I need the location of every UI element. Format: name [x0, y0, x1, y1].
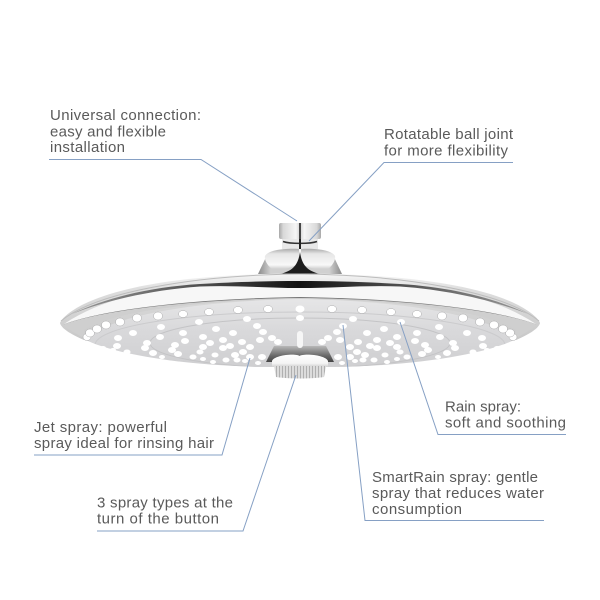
callout: 3 spray types: 3 spray types at the — [97, 494, 233, 512]
mount: upper cylinder — [279, 223, 321, 239]
callout: rain spray: soft and soothing — [445, 414, 566, 432]
callout: universal connection: Universal connection: — [50, 107, 201, 124]
button stem — [297, 331, 303, 348]
callout: 3 spray types — [97, 375, 296, 531]
callout: rain spray — [400, 322, 566, 434]
callout: rain spray: Rain spray: — [445, 398, 521, 416]
disc outer shell — [60, 274, 540, 350]
spray face rings — [94, 312, 506, 367]
rim lower grey line — [64, 298, 536, 325]
spray nozzles right — [318, 306, 517, 365]
callout: smartrain spray — [343, 325, 544, 520]
callout: rotatable ball joint: Rotatable ball joint — [384, 126, 514, 143]
callout: jet spray: Jet spray: powerful — [34, 419, 167, 436]
mount: collar flare — [258, 255, 342, 274]
callout: smartrain spray: consumption — [372, 501, 462, 518]
callout: jet spray — [34, 358, 250, 455]
rim white band — [64, 286, 536, 324]
shower head illustration — [60, 223, 540, 378]
spray selector button — [272, 355, 328, 367]
rim lip — [62, 298, 538, 341]
callout: universal connection — [49, 107, 297, 221]
callout: jet spray: spray ideal for rinsing hair — [34, 435, 214, 452]
callout: rotatable ball joint — [309, 126, 514, 241]
callout: universal connection: installation — [50, 139, 125, 156]
callout: smartrain spray: spray that reduces water — [372, 485, 544, 502]
callout: universal connection: easy and flexible — [50, 124, 166, 140]
rim top edge — [61, 274, 539, 321]
mount: collar center shadow — [280, 252, 320, 274]
callout: rotatable ball joint: for more flexibility — [384, 142, 508, 160]
center nozzles — [296, 306, 304, 321]
button shadow — [266, 346, 334, 362]
spray nozzles left — [83, 306, 282, 365]
mount: collar lobes — [265, 249, 335, 269]
mount: neck — [282, 239, 318, 249]
disc spray face — [84, 299, 516, 367]
callout: 3 spray types: turn of the button — [97, 510, 219, 528]
callout: smartrain spray: SmartRain spray: gentle — [372, 469, 538, 486]
button threads — [274, 366, 326, 378]
rim dark band — [72, 281, 528, 314]
